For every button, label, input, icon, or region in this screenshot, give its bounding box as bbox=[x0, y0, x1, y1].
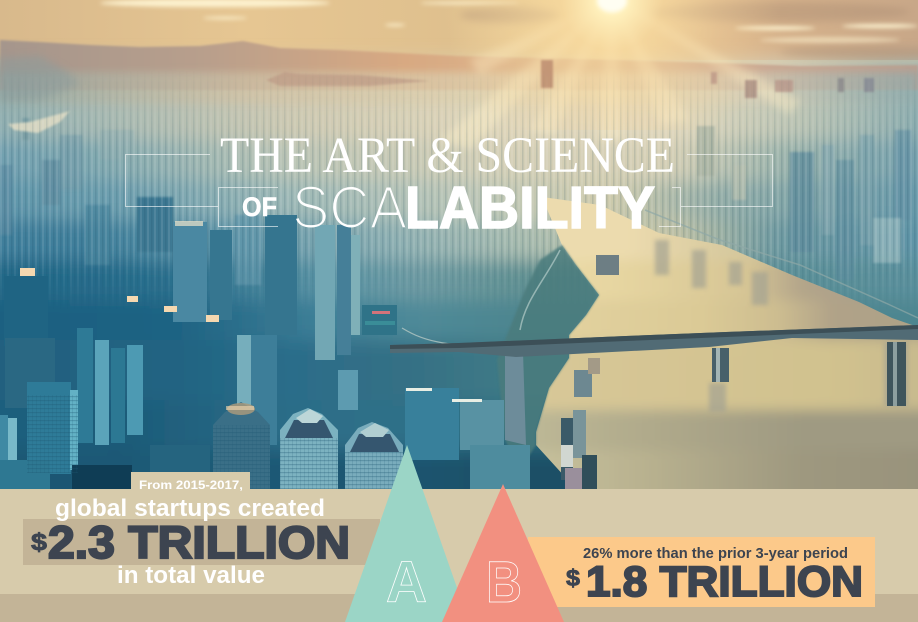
tab bbox=[131, 472, 250, 489]
small far river left bbox=[8, 111, 70, 133]
clouds bbox=[100, 0, 918, 43]
triangle B: B bbox=[486, 550, 522, 615]
text: from 2015-2017: From 2015-2017, bbox=[139, 478, 243, 492]
bridge bbox=[390, 325, 918, 406]
triangle A bbox=[345, 445, 469, 622]
triangle A: A bbox=[386, 550, 427, 615]
panel: stat B box bbox=[528, 537, 875, 607]
far bank road bbox=[645, 210, 918, 318]
dark highlight bar bbox=[23, 519, 380, 565]
left bank bbox=[497, 245, 599, 470]
triangle B bbox=[442, 484, 564, 622]
panel: stat A bbox=[23, 472, 380, 589]
text: in total value: in total value bbox=[117, 562, 265, 589]
sun and rays bbox=[446, 0, 799, 148]
mountains bbox=[0, 40, 918, 102]
text: global startups created: global startups created bbox=[55, 495, 325, 522]
haze and city colour field bbox=[0, 60, 918, 530]
foreground towers bbox=[27, 395, 403, 489]
stat: 1.8 trillion: $ bbox=[566, 565, 580, 591]
title line 2: SCA bbox=[292, 174, 407, 241]
stat: 2.3 trillion: $ bbox=[31, 529, 48, 556]
barges bbox=[561, 255, 619, 489]
stat: 1.8 trillion: 1.8 TRILLION bbox=[586, 558, 863, 606]
tower blocks bbox=[0, 215, 530, 489]
title line 1: THE ART & SCIENCE bbox=[220, 128, 675, 184]
text: 26% more: 26% more than the prior 3-year period bbox=[583, 545, 848, 562]
title: the art & science of scalability bbox=[126, 128, 772, 241]
stat: 2.3 trillion: 2.3 TRILLION bbox=[48, 517, 350, 568]
title line 2 bbox=[242, 174, 655, 241]
title line 2: LABILITY bbox=[405, 175, 655, 241]
distant towers bbox=[0, 60, 911, 285]
title line 2: OF bbox=[242, 192, 277, 222]
city stripes bbox=[0, 90, 918, 286]
river bbox=[536, 198, 918, 489]
title frame bbox=[126, 154, 772, 226]
rooftop lights bbox=[20, 221, 482, 410]
panel: bottom band bbox=[0, 489, 918, 622]
